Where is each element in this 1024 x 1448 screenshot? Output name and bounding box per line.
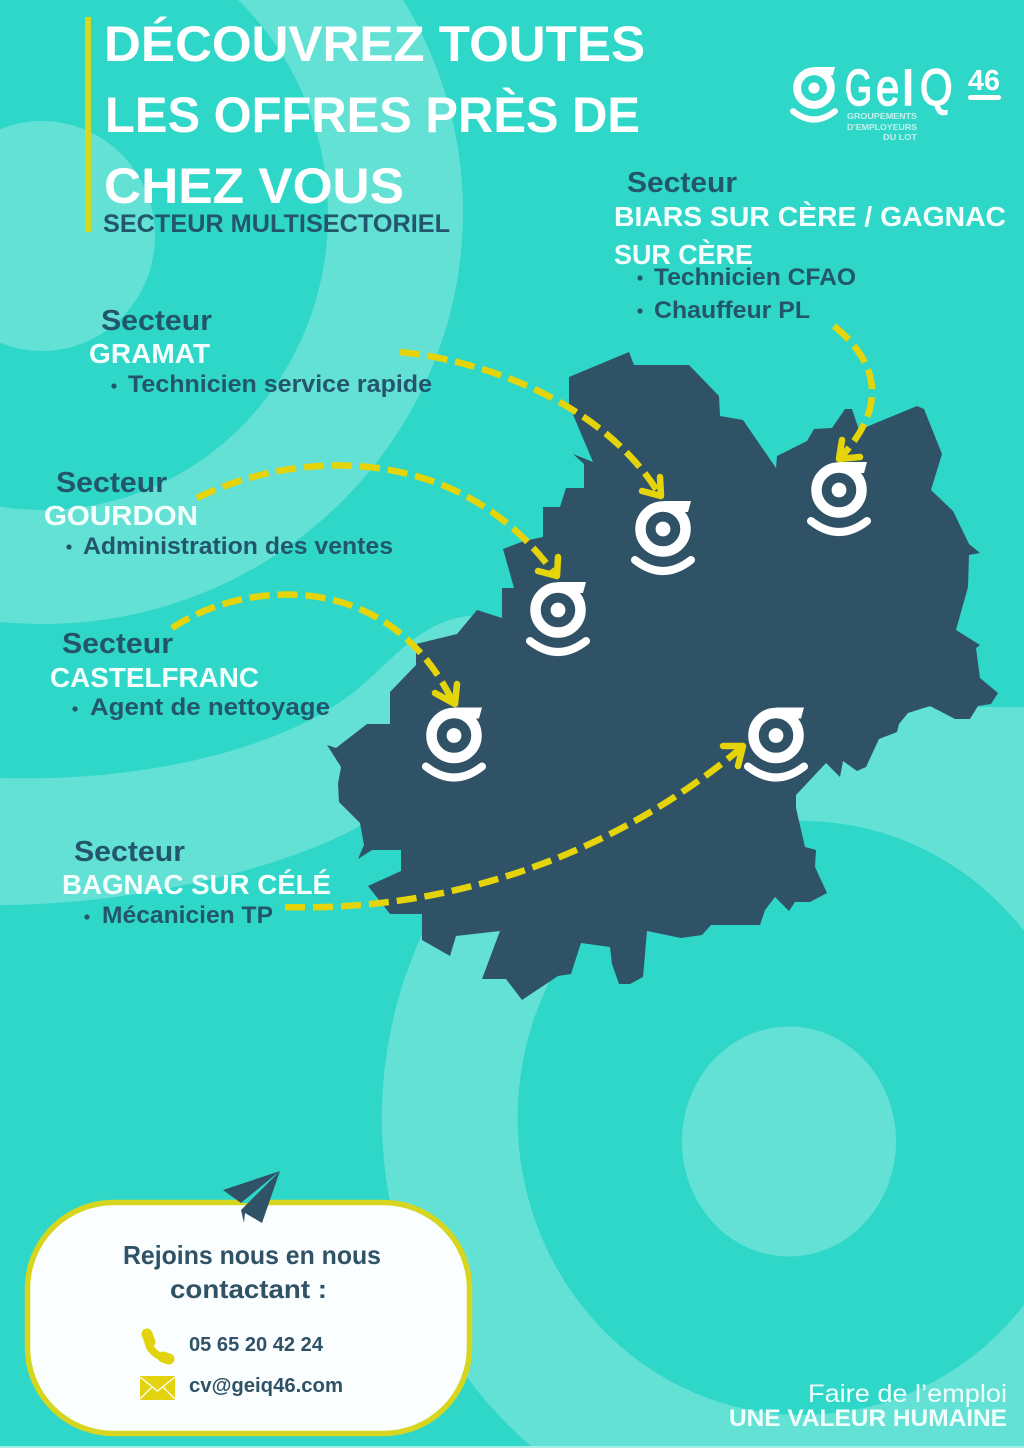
contact heading (123, 1240, 381, 1304)
label: Gourdon: Administration des ventes (83, 533, 393, 560)
phone number: 05 65 20 42 24 (189, 1334, 324, 1356)
title (104, 16, 645, 214)
logo wordmark (845, 59, 953, 117)
arrow: Gourdon (197, 465, 558, 576)
arrow: Biars (834, 326, 872, 459)
label: Biars sur Cère: Technicien CFAO (654, 264, 856, 291)
label: Biars sur Cère: BIARS SUR CÈRE / GAGNAC (614, 201, 1006, 232)
marker: Biars (811, 462, 867, 532)
label: Castelfranc: Agent de nettoyage (90, 694, 330, 721)
logo wordmark: Q (920, 59, 953, 116)
logo wordmark: e (876, 59, 899, 116)
label: Biars sur Cère (614, 167, 1006, 324)
label: Biars sur Cère: Secteur (627, 167, 737, 199)
label: Biars sur Cère: SUR CÈRE (614, 239, 753, 270)
accent bar (85, 17, 91, 232)
label: Bagnac sur Célé: BAGNAC SUR CÉLÉ (62, 869, 331, 900)
slogan: Faire de l’emploi (808, 1380, 1007, 1408)
logo tagline (847, 111, 918, 142)
contact heading: contactant : (170, 1274, 327, 1304)
subtitle: SECTEUR MULTISECTORIEL (103, 210, 450, 238)
map of the Lot department (327, 352, 998, 1000)
label: Gourdon: Secteur (56, 467, 167, 499)
marker: Castelfranc (426, 708, 482, 778)
label: Castelfranc: CASTELFRANC (50, 662, 259, 693)
logo tagline: D’EMPLOYEURS (847, 122, 917, 132)
title: DÉCOUVREZ TOUTES (104, 16, 645, 72)
label: Bagnac sur Célé (62, 836, 331, 929)
label: Bagnac sur Célé: Secteur (74, 836, 185, 868)
logo: GEIQ 46 (793, 59, 1001, 142)
title: LES OFFRES PRÈS DE (105, 87, 640, 143)
logo number: 46 (968, 65, 1000, 97)
logo wordmark: G (845, 61, 872, 117)
marker: Gourdon (530, 582, 586, 652)
marker: Bagnac (748, 708, 804, 778)
location markers (426, 462, 867, 778)
arrow: Castelfranc (172, 594, 457, 704)
slogan: UNE VALEUR HUMAINE (729, 1405, 1007, 1432)
icon: paper plane (223, 1171, 280, 1223)
label: Gramat: GRAMAT (89, 338, 210, 369)
logo tagline: DU LOT (883, 132, 918, 142)
arrow: Gramat (400, 352, 661, 496)
label: Gramat: Secteur (101, 305, 212, 337)
label: Gourdon: GOURDON (44, 500, 198, 531)
email address: cv@geiq46.com (189, 1375, 343, 1397)
label: Castelfranc (50, 628, 330, 721)
logo tagline: GROUPEMENTS (847, 111, 917, 121)
label: Gourdon (44, 467, 393, 560)
icon: envelope (140, 1376, 175, 1400)
label: Castelfranc: Secteur (62, 628, 173, 660)
contact card (28, 1171, 470, 1434)
slogan (729, 1380, 1007, 1432)
contact heading: Rejoins nous en nous (123, 1240, 381, 1270)
arrow: Bagnac (285, 746, 743, 907)
label: Gramat (89, 305, 432, 398)
logo mark (793, 67, 835, 120)
logo wordmark: I (901, 59, 915, 116)
label: Gramat: Technicien service rapide (128, 371, 432, 398)
label: Biars sur Cère: Chauffeur PL (654, 297, 810, 324)
icon: phone (147, 1334, 169, 1359)
title: CHEZ VOUS (104, 158, 404, 214)
marker: Gramat (635, 501, 691, 571)
label: Bagnac sur Célé: Mécanicien TP (102, 902, 273, 929)
